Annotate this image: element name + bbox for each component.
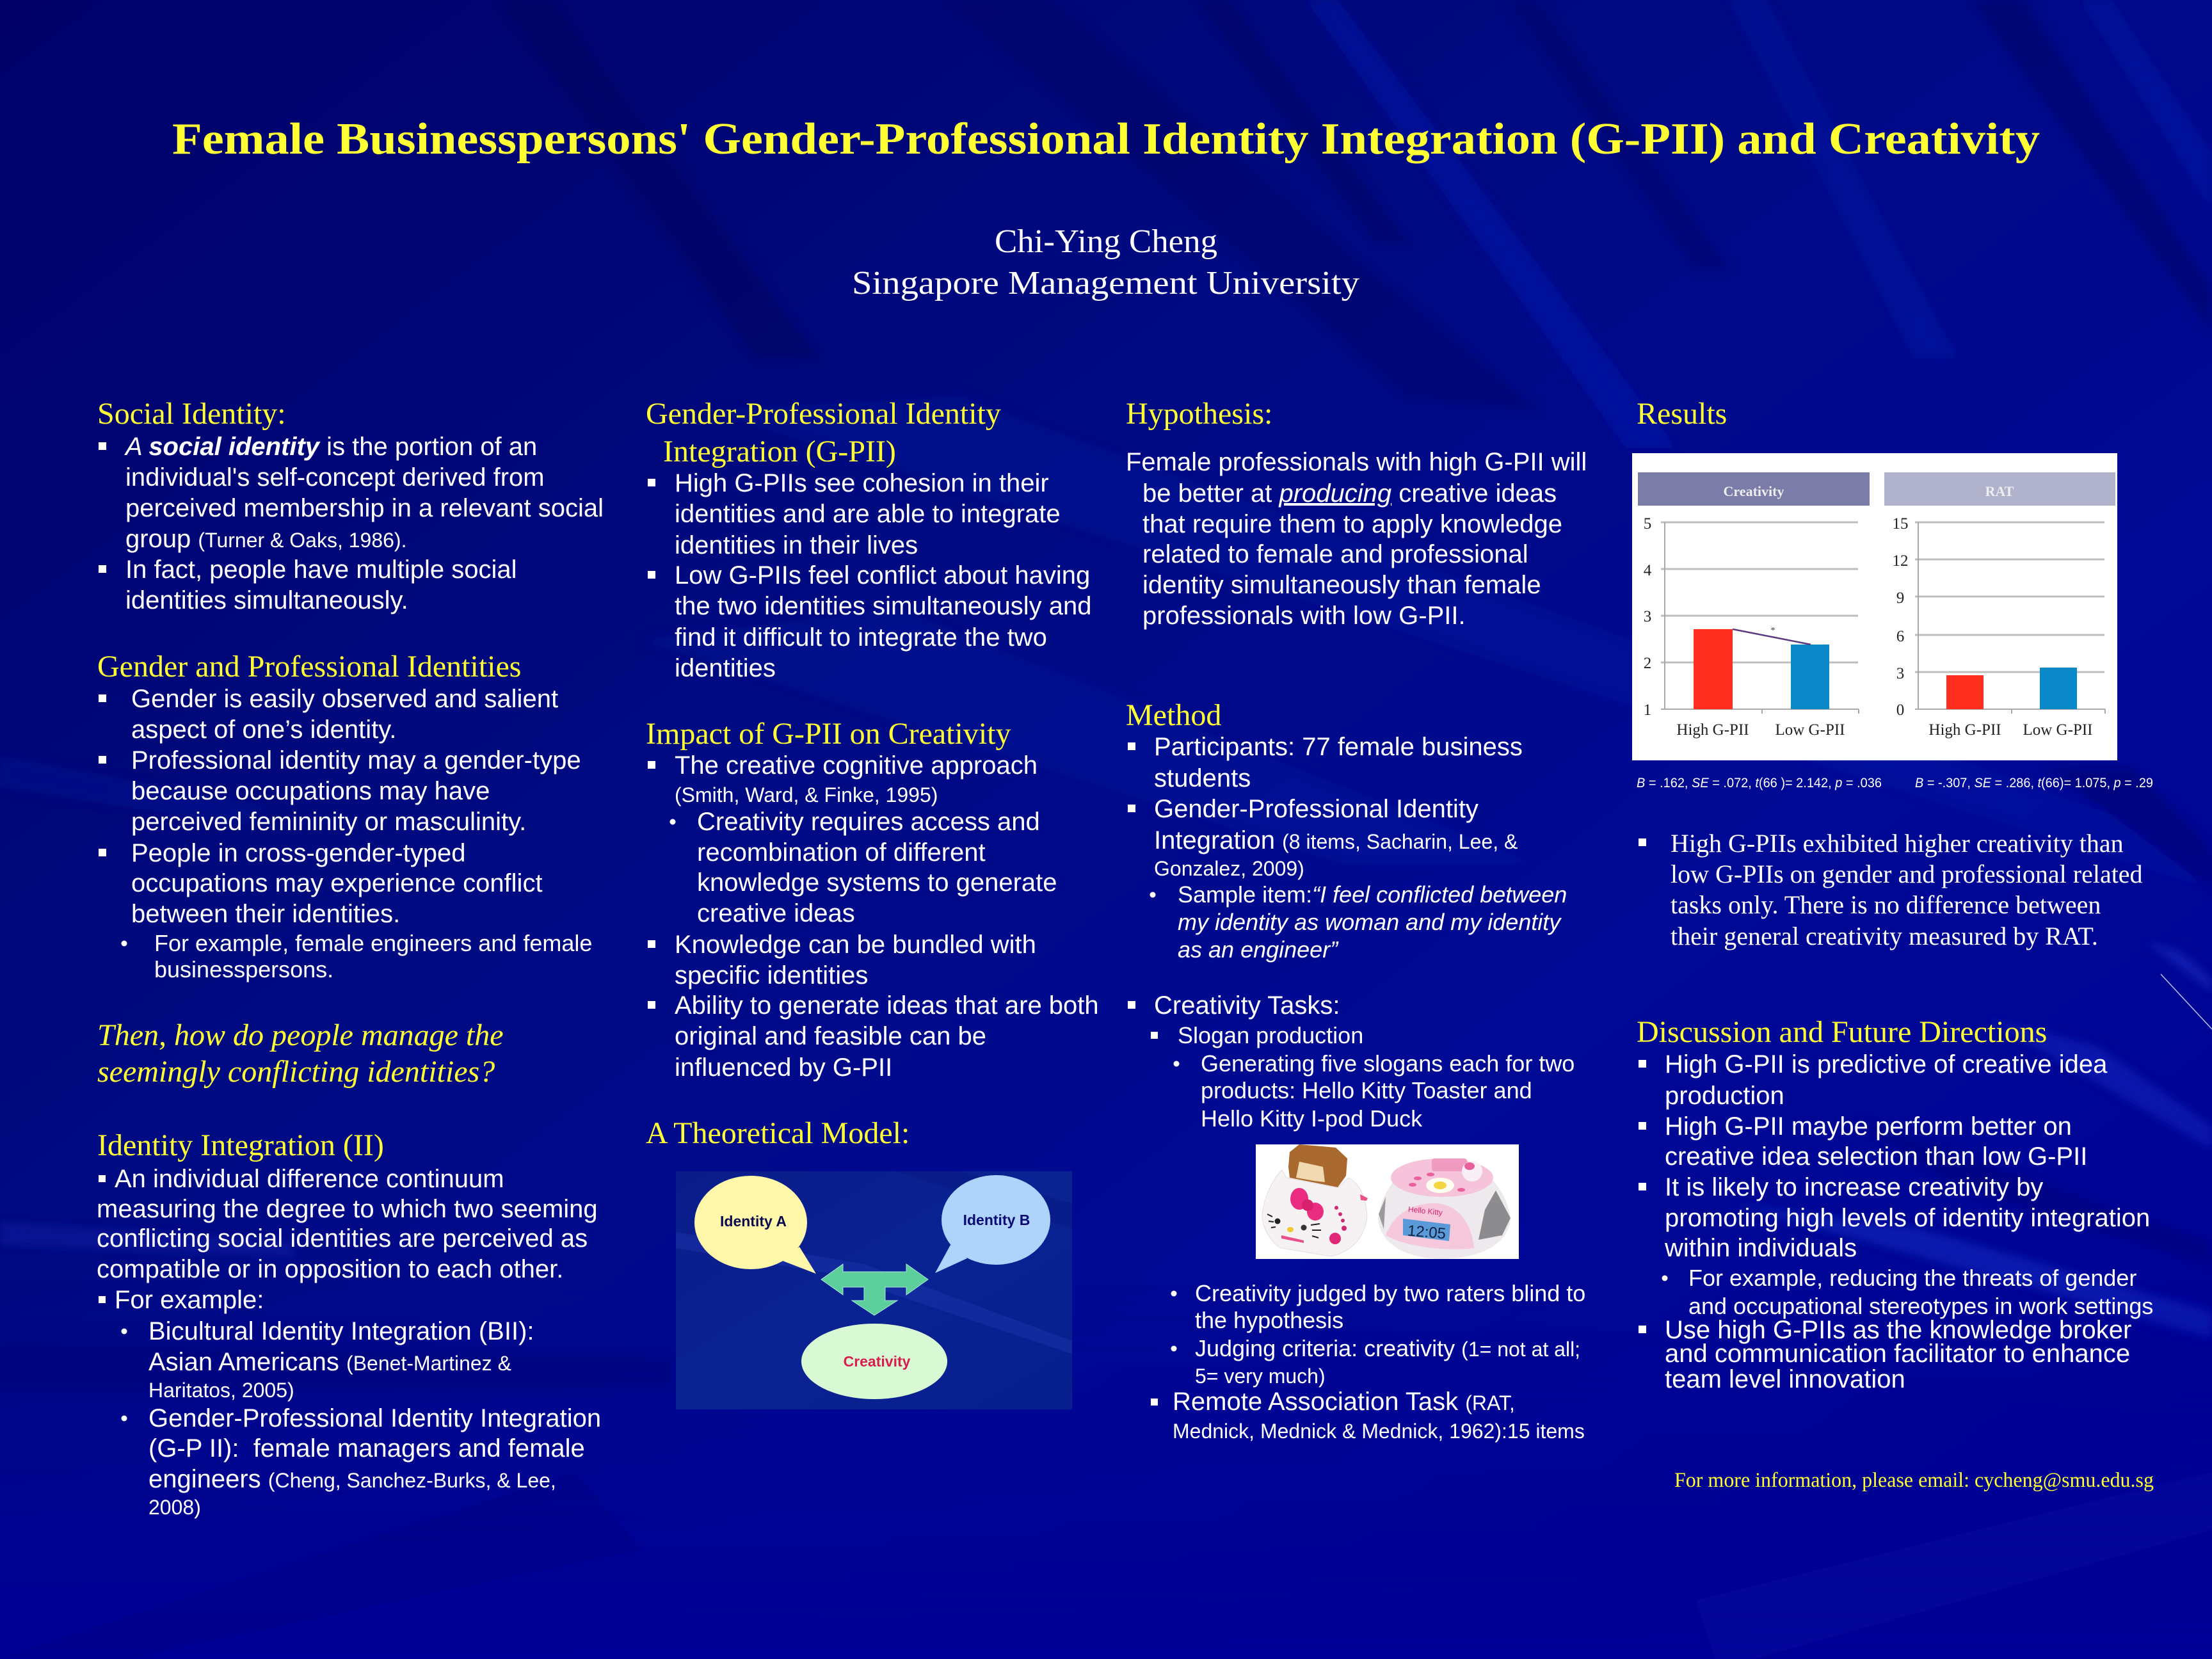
panel: social identity: A social identity is the portion of an bbox=[124, 433, 537, 461]
chart: creativity: Low G-PII bbox=[1775, 721, 1845, 739]
panel: identity integration: Haritatos, 2005) bbox=[148, 1379, 294, 1402]
panel: impact on creativity: Impact of G-PII on Creativity bbox=[646, 717, 1011, 751]
panel: discussion and future directions: High G-PII maybe perform better on bbox=[1665, 1112, 2072, 1141]
chart: creativity: 2 bbox=[1644, 655, 1651, 672]
icon: toast bbox=[1288, 1144, 1347, 1187]
panel: gender and professional identities: People in cross-gender-typed bbox=[131, 839, 466, 867]
chart: creativity: 3 bbox=[1644, 608, 1651, 625]
chart: creativity bbox=[1638, 472, 1870, 739]
panel: impact on creativity: influenced by G-PII bbox=[675, 1054, 892, 1082]
panel: social identity: Social Identity: bbox=[97, 397, 286, 431]
panel: hypothesis: identity simultaneously than female bbox=[1142, 571, 1541, 599]
panel: hypothesis: Female professionals with high G-PII will bbox=[1126, 448, 1587, 476]
statistics captions: B = .162, SE = .072, t(66 )= 2.142, p = .036 bbox=[1637, 776, 1882, 790]
panel: G-PII definition: Gender-Professional Identity bbox=[646, 397, 1001, 431]
panel: judging and RAT: the hypothesis bbox=[1195, 1307, 1343, 1333]
panel: social identity bbox=[97, 397, 604, 614]
panel: impact on creativity bbox=[646, 717, 1099, 1082]
icon: speech bubble Identity A bbox=[694, 1176, 816, 1274]
chart: RAT: Low G-PII bbox=[2023, 721, 2093, 739]
panel: social identity: perceived membership in a relevant social bbox=[125, 494, 604, 522]
results text: tasks only. There is no difference between bbox=[1671, 890, 2101, 919]
panel: impact on creativity: original and feasible can be bbox=[675, 1022, 986, 1050]
panel: G-PII definition: the two identities simultaneously and bbox=[675, 592, 1091, 620]
icon: toaster bbox=[1262, 1170, 1368, 1256]
panel: discussion and future directions: team level innovation bbox=[1665, 1365, 1905, 1393]
chart: RAT bbox=[1884, 472, 2115, 739]
panel: method: Integration (8 items, Sacharin, Lee, & bbox=[1154, 826, 1518, 854]
panel: identity integration: measuring the degree to which two seeming bbox=[97, 1195, 598, 1223]
panel: G-PII definition: Integration (G-PII) bbox=[663, 435, 896, 469]
icon: clock radio bbox=[1378, 1158, 1511, 1259]
panel: hypothesis: be better at producing creative ideas bbox=[1142, 479, 1557, 508]
panel: identity integration: Identity Integration (II) bbox=[97, 1128, 384, 1162]
panel: G-PII definition: Low G-PIIs feel conflict about having bbox=[675, 561, 1090, 589]
panel: identity integration: (G-P II): female managers and female bbox=[148, 1434, 585, 1463]
chart: RAT: 3 bbox=[1896, 665, 1904, 682]
heading: theoretical model: A Theoretical Model: bbox=[646, 1116, 910, 1150]
chart: RAT: RAT bbox=[1985, 483, 2014, 499]
chart: creativity: 4 bbox=[1644, 562, 1652, 579]
column 1 bbox=[97, 397, 604, 1519]
diagram: theoretical model bbox=[676, 1171, 1072, 1409]
panel: method: Generating five slogans each for two bbox=[1201, 1050, 1575, 1077]
panel: discussion and future directions: Use high G-PIIs as the knowledge broker bbox=[1665, 1316, 2131, 1344]
panel: judging and RAT: Judging criteria: creativity (1= not at all; bbox=[1195, 1335, 1580, 1361]
statistics captions: B = -.307, SE = .286, t(66)= 1.075, p = .29 bbox=[1915, 776, 2153, 790]
panel: discussion and future directions: and occupational stereotypes in work settings bbox=[1688, 1293, 2153, 1319]
question callout: Then, how do people manage the bbox=[97, 1018, 504, 1052]
results text: High G-PIIs exhibited higher creativity than bbox=[1671, 829, 2124, 858]
panel: hypothesis: that require them to apply knowledge bbox=[1142, 510, 1562, 538]
panel: identity integration: For example: bbox=[115, 1286, 264, 1314]
panel: gender and professional identities: because occupations may have bbox=[131, 777, 490, 805]
panel: discussion and future directions: within individuals bbox=[1664, 1234, 1857, 1262]
question callout bbox=[97, 1018, 504, 1089]
author and affiliation: Singapore Management University bbox=[852, 265, 1359, 301]
results text: their general creativity measured by RAT. bbox=[1671, 922, 2098, 950]
panel: judging and RAT: Mednick, Mednick & Mednick, 1962):15 items bbox=[1173, 1420, 1585, 1443]
panel: identity integration: engineers (Cheng, Sanchez-Burks, & Lee, bbox=[148, 1465, 556, 1493]
chart: creativity: 1 bbox=[1644, 701, 1651, 719]
panel: gender and professional identities: Gender is easily observed and salient bbox=[131, 685, 558, 713]
contact line: For more information, please email: cycheng@smu.edu.sg bbox=[1674, 1469, 2154, 1492]
panel: G-PII definition: identities bbox=[675, 654, 776, 682]
author and affiliation: Chi-Ying Cheng bbox=[995, 223, 1217, 260]
panel: method: Method bbox=[1126, 698, 1221, 732]
panel: hypothesis: related to female and professional bbox=[1142, 540, 1528, 568]
panel: G-PII definition: identities in their lives bbox=[675, 531, 918, 559]
panel: identity integration: conflicting social identities are perceived as bbox=[97, 1224, 588, 1253]
panel: social identity: individual's self-concept derived from bbox=[125, 463, 545, 492]
column 4 bbox=[1632, 397, 2154, 1492]
panel: gender and professional identities: occupations may experience conflict bbox=[131, 869, 543, 897]
results text: low G-PIIs on gender and professional related bbox=[1671, 860, 2143, 888]
panel: gender and professional identities: businesspersons. bbox=[154, 956, 333, 982]
chart: creativity: High G-PII bbox=[1676, 721, 1749, 739]
panel: hypothesis bbox=[1126, 397, 1587, 630]
chart: RAT: 12 bbox=[1892, 552, 1909, 570]
panel: gender and professional identities: For example, female engineers and female bbox=[154, 930, 592, 956]
panel: gender and professional identities: aspect of one’s identity. bbox=[131, 716, 396, 744]
panel: method: Slogan production bbox=[1178, 1022, 1363, 1048]
panel: discussion and future directions: It is likely to increase creativity by bbox=[1665, 1173, 2043, 1201]
panel: discussion and future directions: production bbox=[1665, 1082, 1784, 1110]
results text bbox=[1639, 829, 2143, 950]
chart: RAT: 6 bbox=[1896, 628, 1904, 645]
panel: identity integration: Asian Americans (Benet-Martinez & bbox=[148, 1348, 511, 1376]
panel: impact on creativity: knowledge systems to generate bbox=[697, 869, 1057, 897]
panel: gender and professional identities: between their identities. bbox=[131, 900, 400, 928]
panel: G-PII definition: High G-PIIs see cohesion in their bbox=[675, 469, 1049, 497]
panel: method: as an engineer” bbox=[1178, 936, 1339, 963]
panel: judging and RAT: 5= very much) bbox=[1195, 1365, 1326, 1388]
panel: social identity: identities simultaneously. bbox=[125, 586, 408, 614]
panel: identity integration bbox=[97, 1128, 601, 1519]
panel: impact on creativity: recombination of different bbox=[697, 838, 986, 867]
panel: identity integration: 2008) bbox=[148, 1496, 201, 1519]
outcome ellipse: Creativity: Creativity bbox=[844, 1353, 911, 1370]
panel: discussion and future directions: High G-PII is predictive of creative idea bbox=[1665, 1050, 2108, 1078]
heading: results: Results bbox=[1637, 397, 1727, 431]
panel: method: Sample item:“I feel conflicted between bbox=[1178, 881, 1567, 908]
panel: impact on creativity: Ability to generate ideas that are both bbox=[675, 991, 1099, 1020]
icon: speech bubble Identity B bbox=[935, 1175, 1050, 1273]
chart: RAT: 9 bbox=[1896, 589, 1904, 607]
panel: social identity: In fact, people have multiple social bbox=[125, 556, 517, 584]
photo: Hello Kitty toaster and clock radio bbox=[1256, 1144, 1519, 1259]
panel: G-PII definition: find it difficult to integrate the two bbox=[675, 623, 1047, 652]
chart: RAT: High G-PII bbox=[1928, 721, 2001, 739]
icon: clock radio: Hello Kitty bbox=[1407, 1205, 1443, 1217]
panel: social identity: group (Turner & Oaks, 1986). bbox=[125, 525, 406, 553]
column 2 bbox=[646, 397, 1099, 1409]
panel: discussion and future directions: creative idea selection than low G-PII bbox=[1665, 1142, 2087, 1171]
panel: gender and professional identities bbox=[97, 650, 592, 982]
panel: method: Gender-Professional Identity bbox=[1154, 795, 1479, 823]
panel: identity integration: compatible or in opposition to each other. bbox=[97, 1255, 563, 1283]
panel: impact on creativity: (Smith, Ward, & Finke, 1995) bbox=[675, 783, 938, 806]
panel: discussion and future directions bbox=[1637, 1015, 2153, 1393]
panel: method: students bbox=[1154, 764, 1251, 792]
panel: hypothesis: professionals with low G-PII. bbox=[1142, 602, 1466, 630]
panel: impact on creativity: The creative cognitive approach bbox=[675, 751, 1038, 780]
panel: method: products: Hello Kitty Toaster and bbox=[1201, 1077, 1532, 1103]
panel: gender and professional identities: Professional identity may a gender-type bbox=[131, 746, 581, 774]
chart: creativity: * bbox=[1770, 626, 1775, 636]
panel: G-PII definition bbox=[646, 397, 1091, 682]
panel: method bbox=[1126, 698, 1575, 1132]
icon: clock radio: 12:05 bbox=[1407, 1222, 1447, 1243]
panel: impact on creativity: specific identities bbox=[675, 961, 868, 990]
statistics captions bbox=[1637, 776, 2153, 790]
panel: judging and RAT: Creativity judged by two raters blind to bbox=[1195, 1280, 1585, 1306]
panel: method: Creativity Tasks: bbox=[1154, 991, 1340, 1020]
panel: impact on creativity: Creativity requires access and bbox=[697, 808, 1040, 836]
title: Female Businesspersons' Gender-Professional Identity Integration (G-PII) and Creativity bbox=[172, 115, 2040, 164]
panel: identity integration: Gender-Professional Identity Integration bbox=[148, 1404, 601, 1432]
panel: method: Hello Kitty I-pod Duck bbox=[1201, 1105, 1423, 1132]
panel: identity integration: An individual difference continuum bbox=[115, 1165, 504, 1193]
panel: gender and professional identities: Gender and Professional Identities bbox=[97, 650, 521, 684]
panel: gender and professional identities: perceived femininity or masculinity. bbox=[131, 808, 526, 836]
panel: discussion and future directions: For example, reducing the threats of gender bbox=[1688, 1265, 2136, 1291]
panel: impact on creativity: creative ideas bbox=[697, 899, 855, 927]
chart: RAT: 0 bbox=[1896, 701, 1904, 719]
chart: creativity: 5 bbox=[1644, 515, 1651, 533]
chart: RAT: 15 bbox=[1892, 515, 1909, 533]
panel: G-PII definition: identities and are able to integrate bbox=[675, 500, 1061, 528]
panel: discussion and future directions: and communication facilitator to enhance bbox=[1665, 1340, 2130, 1368]
author and affiliation bbox=[852, 223, 1359, 301]
question callout: seemingly conflicting identities? bbox=[97, 1055, 495, 1089]
icon: speech bubble Identity B: Identity B bbox=[963, 1212, 1030, 1228]
icon: speech bubble Identity A: Identity A bbox=[720, 1213, 787, 1230]
chart: creativity: Creativity bbox=[1724, 483, 1784, 499]
panel: judging and RAT bbox=[1151, 1280, 1585, 1443]
panel: method: my identity as woman and my identity bbox=[1178, 909, 1562, 935]
panel: identity integration: Bicultural Identity Integration (BII): bbox=[148, 1317, 534, 1345]
outcome ellipse: Creativity bbox=[801, 1324, 947, 1399]
panel: hypothesis: Hypothesis: bbox=[1126, 397, 1272, 431]
panel: discussion and future directions: promoting high levels of identity integration bbox=[1665, 1204, 2150, 1232]
column 3 bbox=[1126, 397, 1587, 1443]
panel: method: Participants: 77 female business bbox=[1154, 733, 1523, 761]
panel: discussion and future directions: Discussion and Future Directions bbox=[1637, 1015, 2047, 1049]
arrow: three-way bbox=[821, 1264, 928, 1315]
panel: impact on creativity: Knowledge can be bundled with bbox=[675, 931, 1036, 959]
panel: method: Gonzalez, 2009) bbox=[1154, 857, 1304, 880]
chart: creativity and RAT bar charts bbox=[1632, 453, 2117, 760]
panel: judging and RAT: Remote Association Task (RAT, bbox=[1173, 1388, 1515, 1416]
